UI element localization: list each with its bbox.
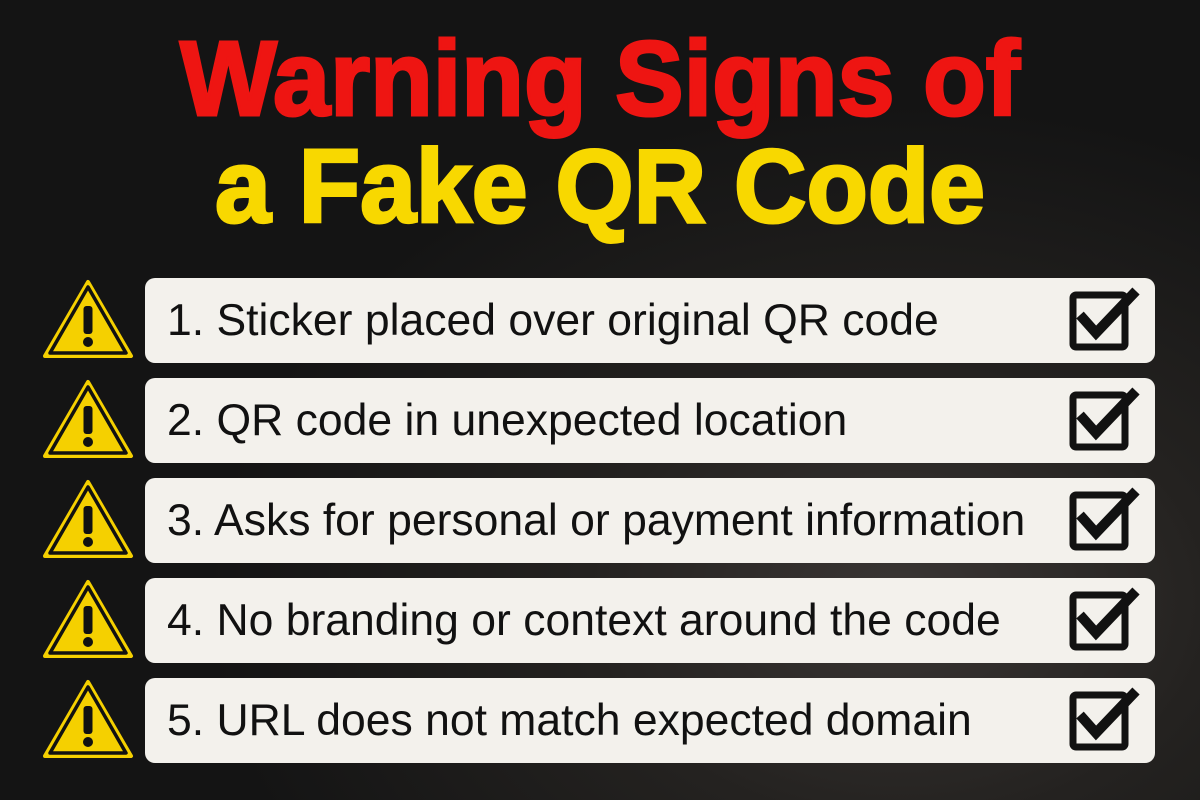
item 3 [43, 478, 1155, 563]
text panel [145, 378, 1155, 463]
icon: warning triangle [43, 480, 134, 558]
icon: checkbox [1070, 388, 1140, 450]
icon: warning triangle [43, 680, 134, 758]
text panel: 1. Sticker placed over original QR code [167, 296, 939, 345]
icon: checkbox [1070, 488, 1140, 550]
text panel: 3. Asks for personal or payment information [167, 496, 1025, 545]
icon: warning triangle [43, 580, 134, 658]
text panel [145, 278, 1155, 363]
icon: checkbox [1070, 688, 1140, 750]
title: a Fake QR Code [215, 129, 985, 245]
text panel [145, 678, 1155, 763]
title [178, 20, 1022, 245]
item 2 [43, 378, 1155, 463]
icon: checkbox [1070, 288, 1140, 350]
list of warning signs [43, 278, 1155, 763]
icon: warning triangle [43, 380, 134, 458]
icon: checkbox [1070, 588, 1140, 650]
text panel: 4. No branding or context around the code [167, 596, 1001, 645]
item 1 [43, 278, 1155, 363]
title: Warning Signs of [180, 20, 1021, 138]
item 5 [43, 678, 1155, 763]
text panel: 5. URL does not match expected domain [167, 696, 972, 745]
item 4 [43, 578, 1155, 663]
text panel [145, 578, 1155, 663]
text panel [145, 478, 1155, 563]
text panel: 2. QR code in unexpected location [167, 396, 847, 445]
icon: warning triangle [43, 280, 134, 358]
